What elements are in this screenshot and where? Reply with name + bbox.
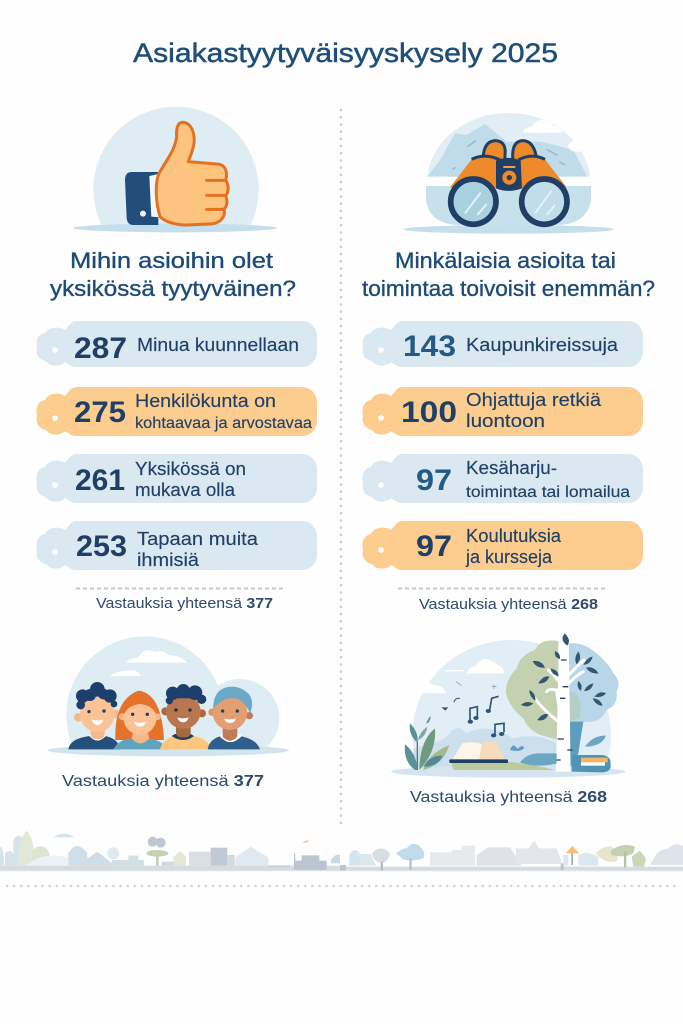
row: 287 Minua kuunnellaan: 287 — [74, 332, 127, 365]
heading: right question: Minkälaisia asioita tai — [395, 248, 616, 273]
row: 97 Koulutuksia: 97 — [416, 530, 452, 563]
left plant — [405, 716, 449, 770]
row: 275 Henkilökunta: Henkilökunta on — [135, 391, 276, 411]
open book — [449, 741, 508, 763]
total: left: Vastauksia yhteensä 377 — [96, 595, 273, 612]
person 2 — [113, 691, 168, 749]
row: 261 Yksikössä: mukava olla — [135, 480, 236, 500]
tree leaves — [521, 633, 606, 721]
small leaves — [585, 736, 606, 747]
row: 253 Tapaan muita: 253 — [76, 530, 127, 563]
row: 253 Tapaan muita — [36, 521, 317, 570]
title: Asiakastyytyväisyyskysely 2025 — [133, 38, 558, 68]
person 1 — [68, 682, 120, 749]
row: 275 Henkilökunta: 275 — [74, 396, 126, 429]
row: 261 Yksikössä: 261 — [75, 464, 125, 497]
heading: left question — [50, 248, 296, 301]
caption: right: Vastauksia yhteensä 268 — [410, 789, 607, 806]
row: 100 Ohjattuja retkiä — [362, 387, 643, 436]
center divider — [340, 110, 342, 826]
illustration: tree, book and music — [391, 633, 626, 778]
row: 275 Henkilökunta: kohtaavaa ja arvostavaa — [135, 415, 312, 432]
bottom dotted divider — [7, 885, 678, 887]
row: 100 Ohjattuja retkiä: luontoon — [466, 411, 545, 431]
skyline: right half — [340, 841, 683, 871]
row: 143 Kaupunkireissuja — [362, 321, 643, 367]
row: 261 Yksikössä — [36, 454, 317, 503]
heading: left question: yksikössä tyytyväinen? — [50, 276, 296, 301]
person 3 — [160, 684, 212, 749]
row: 100 Ohjattuja retkiä: Ohjattuja retkiä — [466, 390, 602, 410]
music notes — [441, 682, 504, 737]
row: 97 Koulutuksia: ja kursseja — [465, 547, 553, 567]
ground and lake — [452, 761, 555, 770]
row: 253 Tapaan muita: Tapaan muita — [137, 529, 259, 549]
icon: thumbs up — [73, 106, 277, 232]
row: 143 Kaupunkireissuja: Kaupunkireissuja — [466, 335, 619, 355]
row: 97 Kesäharju-toimintaa — [362, 454, 643, 503]
heading: right question: toimintaa toivoisit enemmän? — [362, 276, 655, 301]
blue foliage — [568, 643, 619, 723]
row: 287 Minua kuunnellaan — [36, 321, 317, 367]
caption: left: Vastauksia yhteensä 377 — [62, 773, 264, 790]
total: right: Vastauksia yhteensä 268 — [419, 596, 598, 613]
row: 97 Kesäharju-toimintaa: toimintaa tai lomailua — [466, 484, 630, 501]
birch trunk — [556, 635, 571, 772]
row: 143 Kaupunkireissuja: 143 — [403, 330, 456, 363]
row: 97 Koulutuksia: Koulutuksia — [466, 526, 562, 546]
row: 275 Henkilökunta — [36, 387, 317, 436]
row: 287 Minua kuunnellaan: Minua kuunnellaan — [137, 335, 299, 355]
row: 97 Kesäharju-toimintaa: 97 — [416, 464, 452, 497]
small books — [581, 758, 608, 766]
row: 100 Ohjattuja retkiä: 100 — [401, 396, 457, 429]
icon: binoculars — [403, 113, 614, 234]
green foliage — [506, 641, 558, 740]
heading: left question: Mihin asioihin olet — [70, 248, 273, 273]
row: 253 Tapaan muita: ihmisiä — [137, 550, 200, 570]
illustration: four smiling people — [48, 636, 289, 756]
person 4 — [208, 687, 260, 749]
skyline: left half — [0, 831, 340, 871]
row: 97 Kesäharju-toimintaa: Kesäharju- — [466, 458, 557, 478]
heading: right question — [362, 248, 655, 301]
row: 97 Koulutuksia — [362, 521, 643, 570]
row: 261 Yksikössä: Yksikössä on — [135, 459, 246, 479]
